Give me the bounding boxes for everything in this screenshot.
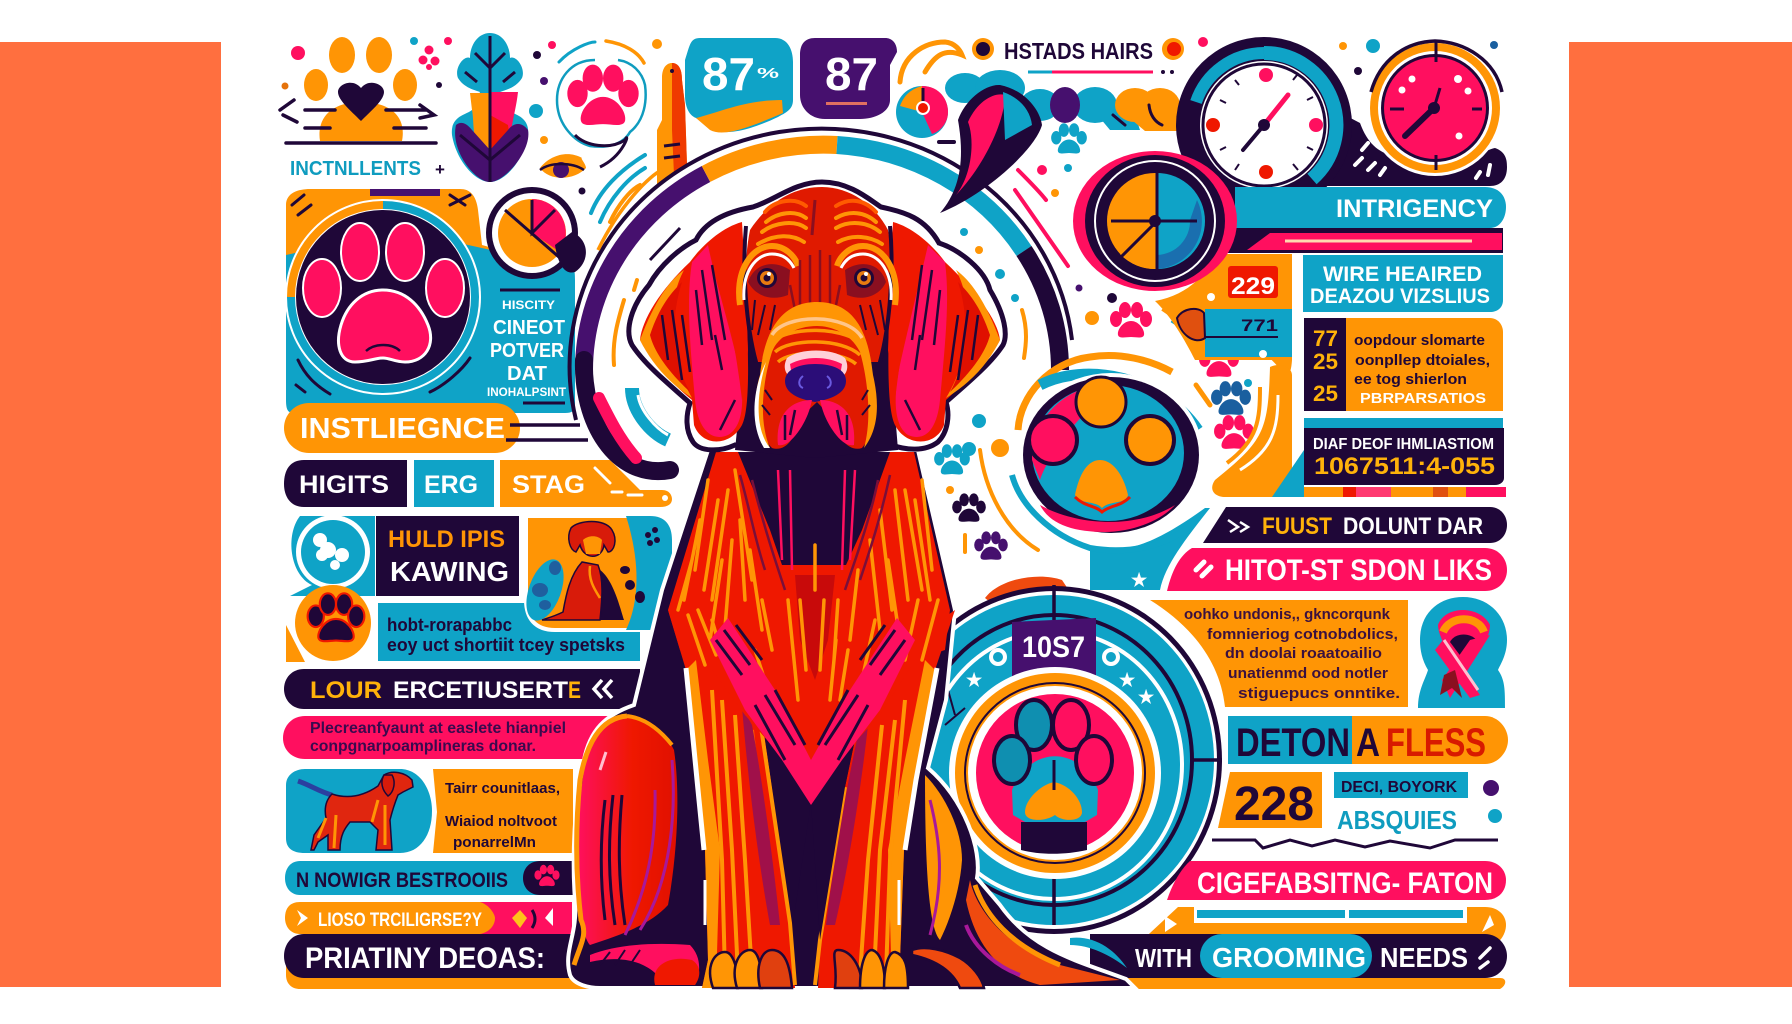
bar: pink note: Plecreanfyaunt at easlete hianpiel: [310, 720, 566, 737]
panel: sitting dog illustration: [519, 516, 672, 630]
bar: PRIATINY DEOAS: [284, 934, 610, 989]
decorative dots near right circle: [946, 414, 1038, 552]
chart: target dial with paw: ★: [1138, 687, 1155, 707]
bar: LIOSO TRCILIGRSE: LIOSO TRCILIGRSE?Y: [318, 910, 482, 931]
panel: numbers and notes: oopdour slomarte: [1354, 332, 1485, 349]
tag: HIGITS: HIGITS: [299, 471, 389, 499]
bar: WITH GROOMING NEEDS: GROOMING: [1212, 942, 1366, 973]
panel text: [487, 290, 567, 403]
icon: claw: [940, 85, 1042, 213]
bar: WITH GROOMING NEEDS: [1070, 934, 1507, 978]
gauge: pie with pink ring: [1073, 151, 1237, 291]
dog: right haunch and tail: [925, 775, 1120, 985]
bar: DETON A FLESS: [1228, 716, 1508, 765]
block: 229 / 771 stats: 229: [1231, 273, 1275, 300]
large paw circle: [285, 199, 481, 395]
panel: teal caption: hobt-rorapabbc: [387, 615, 512, 635]
panel: HULD IPIS KAWING: KAWING: [390, 556, 509, 587]
label: DECI BOYORK: [1334, 772, 1468, 798]
tag: ERG: ERG: [424, 471, 478, 499]
heading: HSTADS HAIRS: HSTADS HAIRS: [1004, 38, 1153, 64]
bar: orange progress: [1135, 907, 1506, 947]
label: DECI BOYORK: DECI, BOYORK: [1341, 779, 1457, 796]
dog: paws: [710, 948, 984, 988]
dog: face: [739, 187, 896, 362]
panel: numbers and notes: 25: [1313, 349, 1338, 374]
panel text: INOHALPSINT: [487, 385, 567, 399]
heading: HSTADS HAIRS: [972, 37, 1498, 75]
stat: 228: [1218, 772, 1322, 831]
dial label 10S7: 10S7: [1022, 631, 1085, 664]
icon: small pie chart: [486, 187, 586, 279]
splash dots: [1355, 143, 1490, 178]
gauge: big white clock: [1176, 37, 1352, 213]
top stat 87%: [685, 38, 793, 132]
bar: DETON A FLESS: A: [1356, 721, 1380, 765]
panel: HULD IPIS KAWING: HULD IPIS: [388, 526, 505, 553]
panel: teal caption: [378, 603, 640, 661]
dog: left haunch: [574, 716, 677, 965]
dog: head: [629, 182, 1005, 458]
panel text: HISCITY: [502, 298, 555, 312]
bar: INTRIGENCY: [1235, 187, 1506, 253]
bar: PRIATINY DEOAS: PRIATINY DEOAS:: [305, 942, 545, 975]
panel text: POTVER: [490, 340, 564, 362]
bar: N NOWIGR BESTROOIIS: [285, 861, 575, 895]
icon: teal small paw: [1051, 123, 1087, 153]
panel: orange paragraph: unatienmd ood notler: [1228, 665, 1388, 682]
icon: eye: [540, 154, 586, 194]
panel: numbers and notes: 25: [1313, 381, 1338, 406]
panel text: CINEOT: [493, 317, 565, 339]
panel: WIRE HEAIRED: WIRE HEAIRED: [1323, 263, 1482, 286]
dog: dark wedges beside chest: [722, 660, 902, 940]
label: INCTNLLENTS: INCTNLLENTS: [290, 158, 421, 180]
dog: chest: [668, 452, 950, 790]
panel text: DAT: [507, 363, 547, 385]
panel: large paw badge: [285, 189, 575, 413]
top stat 87%: 87: [702, 48, 755, 100]
panel: DIAF DEOF stats: DIAF DEOF IHMLIASTIOM: [1313, 436, 1494, 453]
plus mark: +: [435, 160, 445, 179]
icon: top-left heart paw: [280, 37, 452, 143]
chart: target dial with paw: [886, 577, 1222, 934]
tag: HIGITS: [284, 460, 407, 507]
bar: N NOWIGR BESTROOIIS: N NOWIGR BESTROOIIS: [296, 869, 508, 892]
tag: ERG: [414, 460, 494, 507]
bar: WITH GROOMING NEEDS: NEEDS: [1380, 942, 1468, 973]
dog: pink chest V: [710, 618, 915, 805]
base: dark band behind gauges: [1120, 60, 1507, 253]
tag: STAG: [500, 460, 672, 507]
panel: orange note: Tairr counitlaas,: [445, 780, 560, 797]
panel: orange paragraph: stiguepucs onntike.: [1238, 685, 1400, 702]
dog: nose: [785, 364, 846, 402]
gauge: pink clock: [1367, 40, 1503, 176]
teal fin below mid circle: [1090, 508, 1210, 590]
panel: orange note: [433, 769, 573, 853]
panel: orange note: Wiaiod noltvoot: [445, 813, 557, 830]
top stat 87: [800, 38, 897, 119]
decorative teal swooshes: [591, 155, 645, 222]
right orange side panel: [1569, 42, 1792, 987]
dog: brow rings: [739, 246, 896, 305]
panel: numbers and notes: oonpllep dtoiales,: [1355, 352, 1490, 369]
bar: LOUR ERCETIUSERTE: E: [568, 677, 581, 704]
panel: orange paragraph: oohko undonis,, gkncorqunk: [1184, 606, 1391, 623]
dog: right front leg: [815, 610, 955, 988]
panel: DIAF DEOF stats: 1067511:4-055: [1314, 453, 1495, 480]
dog: left front leg: [668, 610, 795, 988]
panel: numbers and notes: PBRPARSATIOS: [1360, 390, 1486, 407]
dog: main illustration: [568, 182, 1135, 988]
dog: dark area behind muzzle: [735, 262, 898, 458]
panel: orange paragraph: fomnieriog cotnobdolics,: [1207, 626, 1398, 643]
bar: HITOT-ST SDON LIKS: HITOT-ST SDON LIKS: [1225, 554, 1492, 587]
dog: body silhouette: [568, 450, 1135, 988]
panel: HULD IPIS KAWING: [376, 516, 519, 596]
stat: 228: 228: [1234, 778, 1314, 831]
panel: WIRE HEAIRED: DEAZOU VIZSLIUS: [1310, 285, 1490, 308]
icon: orange bottle: [657, 63, 687, 185]
panel: orange note: ponarrelMn: [453, 834, 536, 851]
dog: left ear: [640, 222, 748, 442]
bar: HITOT-ST SDON LIKS: [1167, 548, 1507, 591]
chart: target dial with paw: ★: [1119, 670, 1136, 690]
dots: [1483, 780, 1502, 823]
icon: ribbon: [1418, 597, 1507, 708]
base: orange bar behind bottom right: [1100, 978, 1505, 989]
bar: DETON A FLESS: FLESS: [1386, 721, 1486, 765]
bar: CIGEFABSITNG-FATON: CIGEFABSITNG- FATON: [1197, 867, 1493, 900]
ring: arc around dog: [570, 129, 1072, 471]
icon: pink paw in circle: [529, 39, 662, 167]
label: ABSQUIES: ABSQUIES: [1337, 805, 1457, 835]
shape: orange curled ribbon: [1212, 365, 1304, 497]
bar: LIOSO TRCILIGRSE: [285, 902, 572, 934]
bar: LOUR ERCETIUSERTE: LOUR: [310, 677, 382, 704]
bar: FUUST DOLUNT DAR: DOLUNT DAR: [1343, 513, 1483, 540]
bar: INTRIGENCY: INTRIGENCY: [1336, 195, 1493, 223]
badge: mid right paw circle: [1012, 355, 1203, 550]
scattered dots: [960, 164, 1117, 358]
icon: orange paw badge: [286, 585, 371, 662]
dog: left hind foot: [590, 944, 699, 985]
icon: scattered paws: [934, 302, 1254, 560]
panel: standing dog: [286, 769, 432, 853]
dog: right ear: [888, 222, 1000, 442]
block: 229 / 771 stats: [1155, 254, 1292, 374]
top stat 87: 87: [825, 48, 878, 100]
bar: FUUST DOLUNT DAR: [1203, 507, 1507, 543]
decorative cloud strip: [945, 70, 1185, 131]
bar: LOUR ERCETIUSERTE: [284, 669, 640, 709]
swoosh and small pie: [896, 42, 962, 142]
dog: muzzle: [754, 302, 877, 449]
bar: WITH GROOMING NEEDS: WITH: [1135, 943, 1192, 973]
bar: pink note: [283, 716, 630, 759]
star accent: ★: [1131, 570, 1148, 590]
panel: orange paragraph: [1150, 600, 1408, 707]
left orange side panel: [0, 42, 221, 987]
panel: numbers and notes: [1304, 318, 1503, 411]
pill: INSTLIEGNCE: INSTLIEGNCE: [300, 413, 505, 445]
panel: numbers and notes: ee tog shierlon: [1354, 371, 1467, 388]
dial label 10S7: [1012, 618, 1096, 677]
panel: numbers and notes: 77: [1313, 326, 1338, 351]
pill: INSTLIEGNCE: [284, 403, 588, 453]
panel: WIRE HEAIRED: [1303, 255, 1503, 312]
icon: leaf ornament: [452, 33, 528, 182]
panel: paw badge teal: [286, 515, 375, 596]
block: 229 / 771 stats: 771: [1241, 316, 1278, 335]
bar: FUUST DOLUNT DAR: FUUST: [1262, 513, 1332, 540]
bar: DETON A FLESS: DETON: [1236, 721, 1350, 765]
bar: LOUR ERCETIUSERTE: ERCETIUSERT: [393, 677, 568, 704]
chart: target dial with paw: ★: [966, 670, 983, 690]
panel: teal caption: eoy uct shortiit tcey spetsks: [387, 635, 625, 655]
panel: orange paragraph: dn doolai roaatoailio: [1225, 645, 1382, 662]
tag: STAG: STAG: [512, 471, 585, 499]
bar: pink note: conpgnarpoamplineras donar.: [310, 738, 536, 755]
panel: DIAF DEOF stats: [1304, 418, 1506, 497]
top stat 87%: %: [757, 65, 779, 82]
decorative squiggle: [1212, 840, 1498, 848]
